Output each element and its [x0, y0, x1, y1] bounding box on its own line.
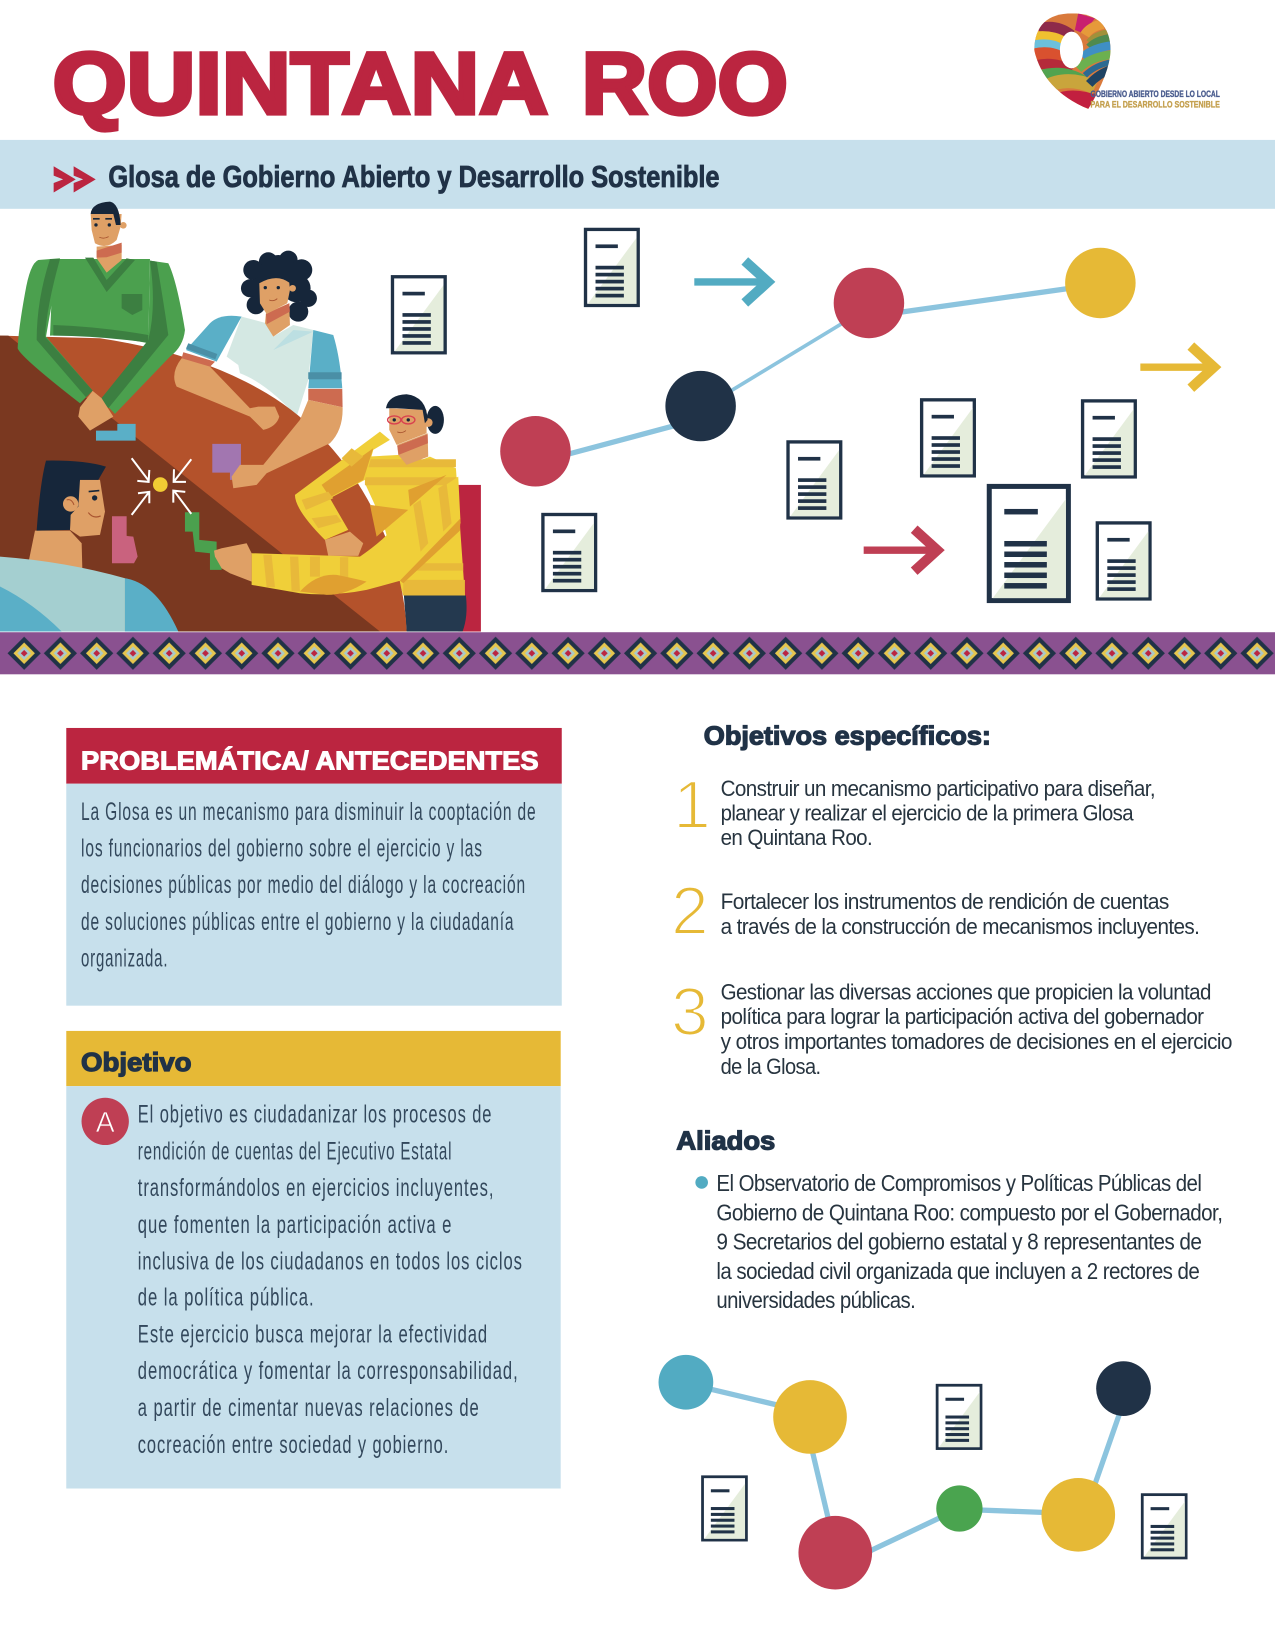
pink puzzle piece — [112, 516, 138, 563]
centre spark with arrows — [132, 458, 191, 515]
blue puzzle piece — [96, 424, 136, 441]
panel: problematica: PROBLEMÁTICA/ ANTECEDENTES — [81, 746, 539, 776]
woman in yellow sweater — [252, 394, 461, 595]
panel: problematica: de soluciones públicas entre el gobierno y la ciudadanía — [81, 909, 514, 936]
heading: aliados: Aliados — [676, 1125, 775, 1155]
title: ROO — [582, 35, 788, 133]
subtitle band: Glosa de Gobierno Abierto y Desarrollo Sostenible — [108, 160, 720, 194]
panel: objetivo: democrática y fomentar la corresponsabilidad, — [138, 1358, 519, 1385]
panel: objetivo: cocreación entre sociedad y gobierno. — [138, 1432, 449, 1459]
panel: objetivo: rendición de cuentas del Ejecutivo Estatal — [138, 1138, 452, 1165]
objective 1: en Quintana Roo. — [721, 825, 872, 850]
objective 2 — [671, 874, 1199, 949]
arrow: red — [864, 529, 937, 571]
objective 1 — [673, 768, 1155, 850]
panel: problematica — [66, 728, 562, 1006]
heading: objetivos especificos: Objetivos específicos: — [704, 720, 991, 750]
illustration: people around a table — [0, 202, 481, 632]
arm of woman in white shirt — [232, 400, 343, 488]
arrow: blue — [694, 261, 768, 303]
objective 1: planear y realizar el ejercicio de la primera Glosa — [721, 801, 1134, 826]
panel: problematica: organizada. — [81, 946, 168, 973]
table — [0, 336, 407, 632]
objective 1: Construir un mecanismo participativo para diseñar, — [721, 776, 1155, 801]
panel: objetivo: inclusiva de los ciudadanos en todos los ciclos — [138, 1249, 523, 1276]
allies list: la sociedad civil organizada que incluyen a 2 rectores de — [716, 1258, 1199, 1284]
objective 3: 3 — [671, 975, 709, 1050]
panel: problematica: decisiones públicas por medio del diálogo y la cocreación — [81, 872, 526, 899]
objective 3: política para lograr la participación activa del gobernador — [721, 1004, 1204, 1029]
panel: objetivo: de la política pública. — [138, 1284, 315, 1311]
allies list: Gobierno de Quintana Roo: compuesto por el Gobernador, — [716, 1199, 1222, 1225]
arrow: yellow — [1140, 346, 1214, 388]
objective 3: y otros importantes tomadores de decisiones en el ejercicio — [721, 1029, 1232, 1054]
purple puzzle piece — [212, 444, 241, 480]
objective 2: a través de la construcción de mecanismos incluyentes. — [721, 914, 1199, 939]
green puzzle piece — [185, 512, 222, 570]
network diagram: bottom — [659, 1355, 1151, 1590]
allies list — [695, 1170, 1222, 1313]
man in foreground — [0, 461, 178, 632]
woman in white shirt — [174, 251, 317, 430]
panel: objetivo: a partir de cimentar nuevas relaciones de — [138, 1395, 480, 1422]
network diagram: top — [500, 248, 1136, 487]
hand holding green piece — [214, 543, 252, 582]
document icons at bottom — [703, 1385, 1186, 1558]
logo: gobierno abierto: PARA EL DESARROLLO SOSTENIBLE — [1091, 99, 1220, 109]
panel: objetivo — [66, 1031, 561, 1489]
objective 3 — [671, 975, 1232, 1079]
decorative diamond band — [0, 632, 1275, 674]
allies list: El Observatorio de Compromisos y Políticas Públicas del — [716, 1170, 1201, 1196]
panel: objetivo: Objetivo — [81, 1047, 191, 1077]
title — [53, 35, 788, 133]
document icons in illustration — [392, 229, 1150, 601]
panel: objetivo: El objetivo es ciudadanizar los procesos de — [138, 1101, 492, 1128]
logo: gobierno abierto — [1030, 10, 1220, 113]
objective 2: Fortalecer los instrumentos de rendición de cuentas — [721, 889, 1169, 914]
panel: objetivo: que fomenten la participación activa e — [138, 1212, 452, 1239]
objective 1: 1 — [673, 768, 711, 843]
logo: gobierno abierto: GOBIERNO ABIERTO DESDE LO LOCAL — [1091, 89, 1220, 99]
panel: objetivo: transformándolos en ejercicios incluyentes, — [138, 1175, 494, 1202]
panel: objetivo: A — [96, 1107, 115, 1139]
panel: objetivo: Este ejercicio busca mejorar la efectividad — [138, 1321, 488, 1348]
allies list: universidades públicas. — [716, 1287, 915, 1313]
man in green sweater — [18, 202, 185, 431]
objective 2: 2 — [671, 874, 709, 949]
panel: problematica: los funcionarios del gobierno sobre el ejercicio y las — [81, 835, 483, 862]
objective 3: Gestionar las diversas acciones que propicien la voluntad — [721, 979, 1211, 1004]
subtitle band — [0, 140, 1275, 209]
objective 3: de la Glosa. — [721, 1054, 821, 1079]
title: QUINTANA — [53, 35, 548, 133]
panel: problematica: La Glosa es un mecanismo para disminuir la cooptación de — [81, 799, 537, 826]
allies list: 9 Secretarios del gobierno estatal y 8 representantes de — [716, 1229, 1201, 1255]
